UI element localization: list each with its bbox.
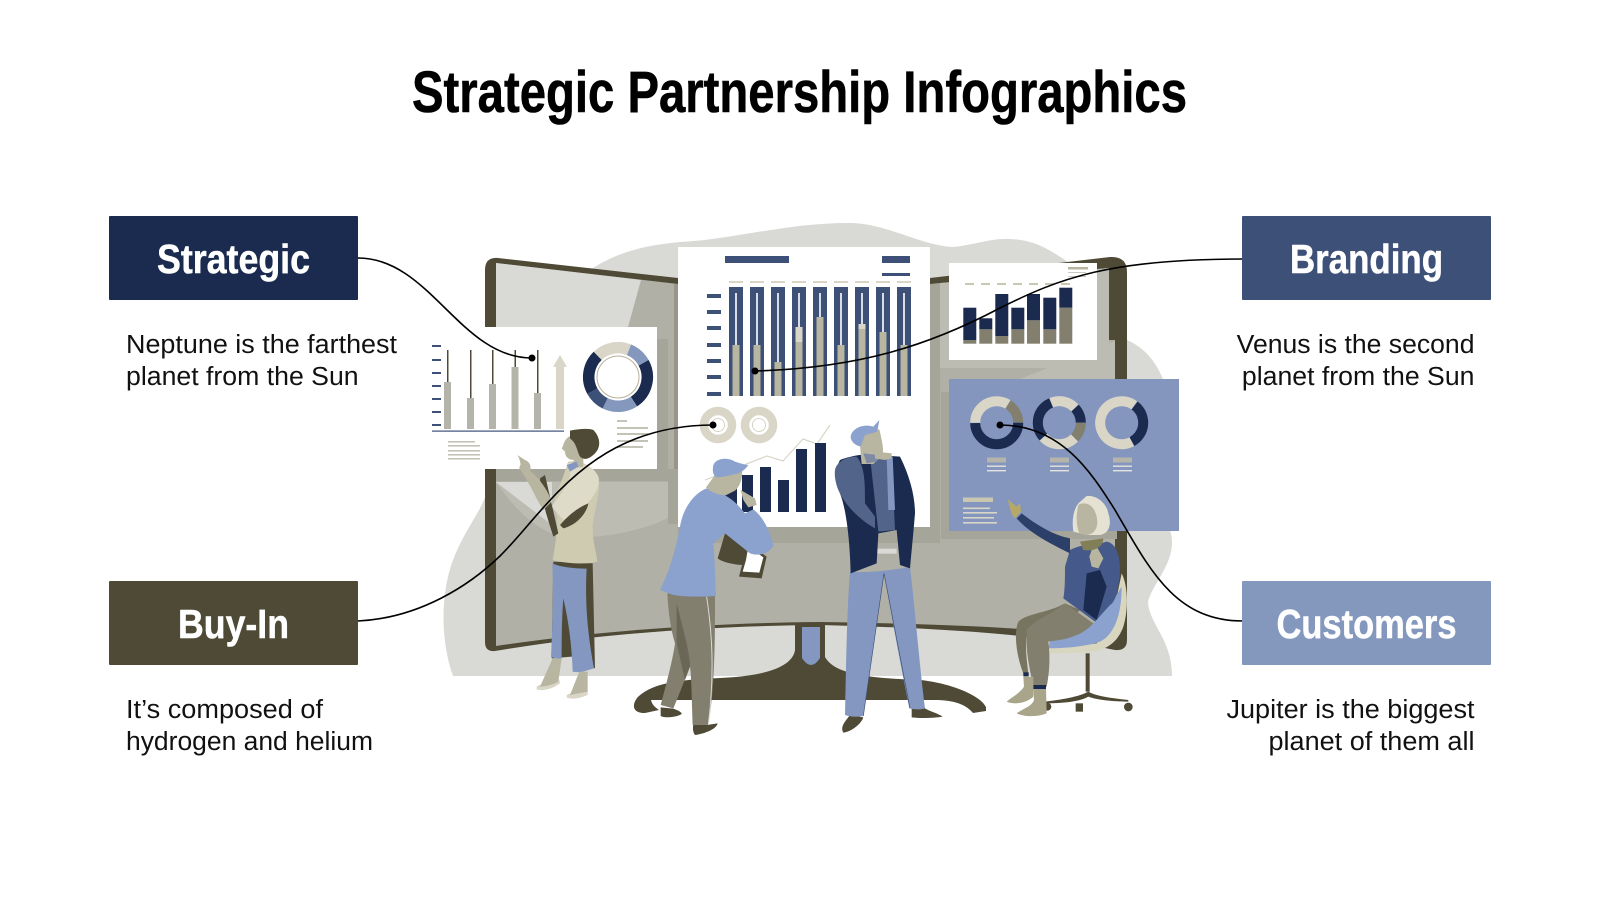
person: seated woman with chair: [1007, 496, 1133, 716]
text: Customers description: [1226, 696, 1474, 756]
panel: Buy-In: [109, 581, 373, 756]
text: Buy-In description: hydrogen and helium: [126, 728, 373, 756]
panel: Branding: Branding: [1290, 236, 1443, 282]
text: Branding description: [1237, 331, 1474, 391]
candle bar chart: [432, 345, 567, 432]
blue card donut 3: [1092, 393, 1152, 453]
central card: [678, 247, 930, 527]
left donut: [577, 336, 659, 418]
person: standing woman: [517, 429, 599, 699]
target circles: [704, 411, 773, 439]
blue card: [949, 379, 1179, 531]
blue card donut 2: [1029, 392, 1090, 453]
text: Strategic description: Neptune is the farthest: [126, 331, 397, 359]
central ticks: [707, 294, 721, 396]
monitor: [485, 257, 1127, 651]
left card legends: [448, 420, 648, 460]
lower bar chart: [725, 443, 826, 512]
connector: Branding: [752, 259, 1243, 374]
blue card donut 1: [967, 393, 1026, 452]
text: Branding description: planet from the Sun: [1242, 363, 1474, 391]
text: Buy-In description: It’s composed of: [126, 696, 324, 724]
person: bearded man: [835, 420, 943, 733]
central illustration: [430, 223, 1179, 735]
central bar columns: [729, 287, 911, 396]
stacked bars: [963, 288, 1072, 344]
panel: Customers: Customers: [1276, 601, 1456, 647]
text: Buy-In description: [126, 696, 373, 756]
top right card: [949, 263, 1097, 360]
monitor stand: [634, 625, 986, 713]
panel: Strategic: Strategic: [157, 236, 310, 282]
blue card legends: [963, 458, 1132, 524]
connector: Customers: [996, 422, 1243, 621]
left card: [430, 327, 659, 469]
text: Customers description: Jupiter is the biggest: [1226, 696, 1474, 724]
text: Strategic description: [126, 331, 397, 391]
connector: Strategic: [358, 258, 536, 362]
connector: Buy-In: [358, 422, 716, 621]
text: Customers description: planet of them all: [1268, 728, 1474, 756]
trend line: [705, 425, 830, 480]
person: man with cap: [660, 459, 773, 735]
panel: Customers: [1226, 581, 1491, 756]
text: Strategic description: planet from the Sun: [126, 363, 359, 391]
text: Branding description: Venus is the second: [1237, 331, 1474, 359]
panel: Strategic: [109, 216, 397, 391]
background blob: [443, 223, 1172, 676]
title: Strategic Partnership Infographics: [412, 60, 1187, 125]
panel: Buy-In: Buy-In: [178, 601, 289, 647]
panel: Branding: [1237, 216, 1491, 391]
central top dashes: [729, 281, 911, 283]
